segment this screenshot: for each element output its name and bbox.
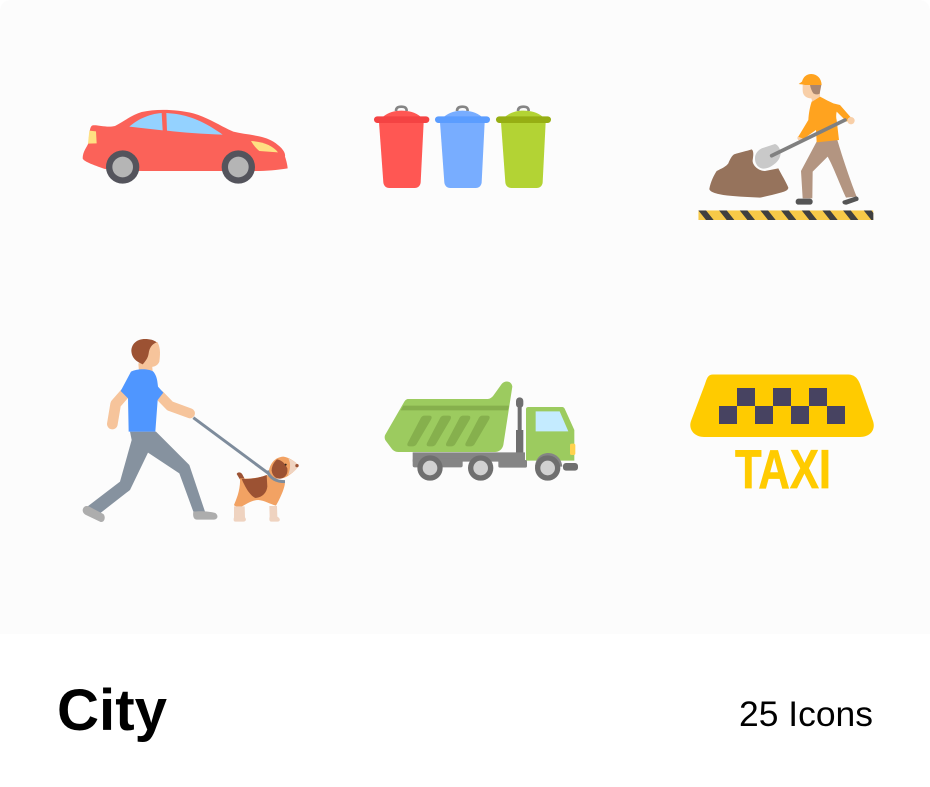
rear arm xyxy=(112,393,125,424)
infographic canvas xyxy=(59,74,874,742)
icon: green dump truck xyxy=(385,381,578,481)
sign plate xyxy=(690,374,874,437)
hair xyxy=(131,339,157,364)
saddle patch xyxy=(242,475,267,498)
dump bed xyxy=(385,381,512,452)
shoes xyxy=(796,199,813,205)
checker pattern xyxy=(719,388,845,424)
blue bin xyxy=(435,107,490,188)
helmet xyxy=(799,74,822,85)
leash xyxy=(193,418,268,473)
icon: taxi roof sign xyxy=(690,374,874,500)
dog xyxy=(234,457,299,522)
icon: three trash bins xyxy=(374,107,551,188)
wheel arch and bumper xyxy=(535,453,562,467)
front arm xyxy=(159,395,190,413)
body xyxy=(234,475,285,507)
head xyxy=(269,457,298,479)
chassis xyxy=(413,452,525,462)
icon: road worker with shovel xyxy=(698,74,879,220)
piston xyxy=(516,397,523,408)
green bin xyxy=(496,107,551,188)
left hand xyxy=(797,136,802,140)
wheels xyxy=(417,455,443,481)
icon: red car xyxy=(83,110,288,184)
icon count: 25 Icons xyxy=(739,695,873,734)
t-shirt xyxy=(121,369,163,432)
shovel xyxy=(755,144,781,169)
collar xyxy=(267,471,285,482)
shoes xyxy=(83,506,105,522)
icon: man walking dog xyxy=(83,339,299,522)
right hand xyxy=(847,117,855,124)
dirt pile xyxy=(709,149,788,198)
neck and face xyxy=(138,360,153,372)
title: City xyxy=(57,678,167,743)
cab xyxy=(526,407,574,461)
bed ribs xyxy=(407,416,432,446)
head and neck xyxy=(803,84,820,102)
shirt xyxy=(798,97,852,142)
legs xyxy=(234,506,246,522)
ear xyxy=(272,459,287,479)
handle xyxy=(772,120,845,156)
taxi lettering: TAXI xyxy=(735,438,831,500)
trousers xyxy=(87,432,205,513)
trousers xyxy=(801,138,857,198)
snout xyxy=(288,458,299,475)
red bin xyxy=(374,107,429,188)
hazard stripe bar xyxy=(698,210,879,220)
tail xyxy=(237,472,245,481)
